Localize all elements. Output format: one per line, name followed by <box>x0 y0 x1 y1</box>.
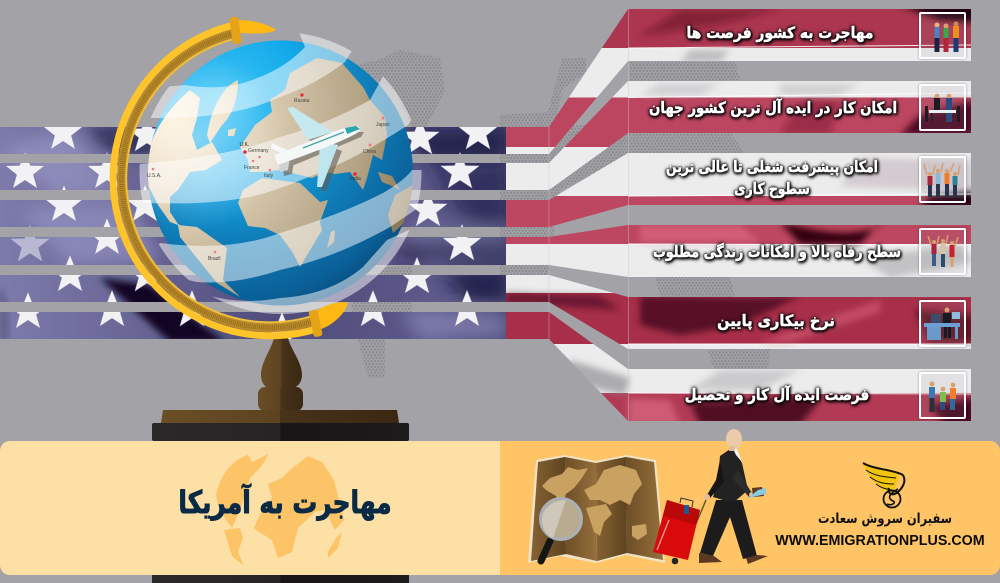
airplane <box>271 107 364 191</box>
walking businessman <box>699 429 768 564</box>
icon: cheering team <box>919 156 966 203</box>
banner text <box>663 156 881 203</box>
icon: colleagues talking <box>919 372 966 419</box>
city labels <box>147 98 390 262</box>
translucent flag stripes over globe <box>140 33 422 314</box>
city labels: India <box>350 176 361 182</box>
banner: work in the most ideal country <box>646 82 968 132</box>
ring bottom cap <box>308 309 323 338</box>
banner text: امکان پیشرفت شغلی تا عالی ترین <box>666 158 878 176</box>
banner: high welfare and desired living <box>650 226 968 276</box>
magnifying glass <box>540 498 582 561</box>
banner: low unemployment <box>715 298 968 348</box>
banner: immigration to the land of opportunity <box>684 12 968 60</box>
banner text: سطح رفاه بالا و امکانات زندگی مطلوب <box>653 243 901 261</box>
city labels: U.S.A. <box>147 173 161 179</box>
city labels: China <box>363 149 376 155</box>
website url: WWW.EMIGRATIONPLUS.COM <box>775 533 985 549</box>
stand black base <box>152 423 409 441</box>
faint world globe behind title <box>216 454 344 566</box>
red suitcase <box>653 498 706 564</box>
globe highlight <box>148 40 413 306</box>
icon: handshake at table <box>919 84 966 131</box>
city labels: Italy <box>264 173 274 179</box>
folded treasure map illustration <box>528 455 665 563</box>
globe stand: base and neck <box>152 338 409 583</box>
banner text: سطوح کاری <box>734 180 810 198</box>
left flag panel: navy field with stars <box>0 113 507 348</box>
map continents <box>542 465 647 540</box>
city labels: Russia <box>294 98 310 104</box>
company name: سفیران سروش سعادت <box>818 511 952 527</box>
red and white ribbon connector panels <box>500 0 980 433</box>
city markers <box>152 93 384 253</box>
company logo: bird emblem <box>863 463 904 508</box>
city labels: U.K. <box>240 142 249 148</box>
ring end top tip <box>238 20 276 34</box>
banner text: امکان کار در ایده آل ترین کشور جهان <box>649 99 897 117</box>
bottom card: logo side <box>500 441 1000 575</box>
icon: celebrating group <box>919 228 966 275</box>
banner text: مهاجرت به کشور فرصت ها <box>687 24 873 42</box>
brass meridian ring <box>113 16 348 338</box>
ring end bottom tip <box>314 302 348 330</box>
city labels: France <box>244 165 260 171</box>
banner text: نرخ بیکاری پایین <box>717 312 835 330</box>
city labels: Brazil <box>208 256 221 262</box>
icon: team of three <box>919 12 966 59</box>
city labels: Japan <box>376 122 390 128</box>
stand top plate <box>161 410 399 423</box>
bottom card: title side <box>0 441 500 575</box>
stand neck <box>261 338 302 388</box>
banner text: فرصت ایده آل کار و تحصیل <box>685 386 869 404</box>
thin fold guides across the ribbons <box>549 9 628 421</box>
city labels: Germany <box>248 148 269 154</box>
plane shadow <box>279 111 364 191</box>
continents <box>148 58 413 297</box>
dotted world map background <box>350 50 770 378</box>
stand knob <box>258 387 303 411</box>
icon: man at office desk <box>919 300 966 347</box>
title: مهاجرت به آمریکا <box>178 485 392 521</box>
ring top cap <box>229 16 242 44</box>
globe <box>125 30 430 330</box>
banner: ideal job and study opportunity <box>682 370 968 420</box>
banner: career progress <box>663 154 968 204</box>
